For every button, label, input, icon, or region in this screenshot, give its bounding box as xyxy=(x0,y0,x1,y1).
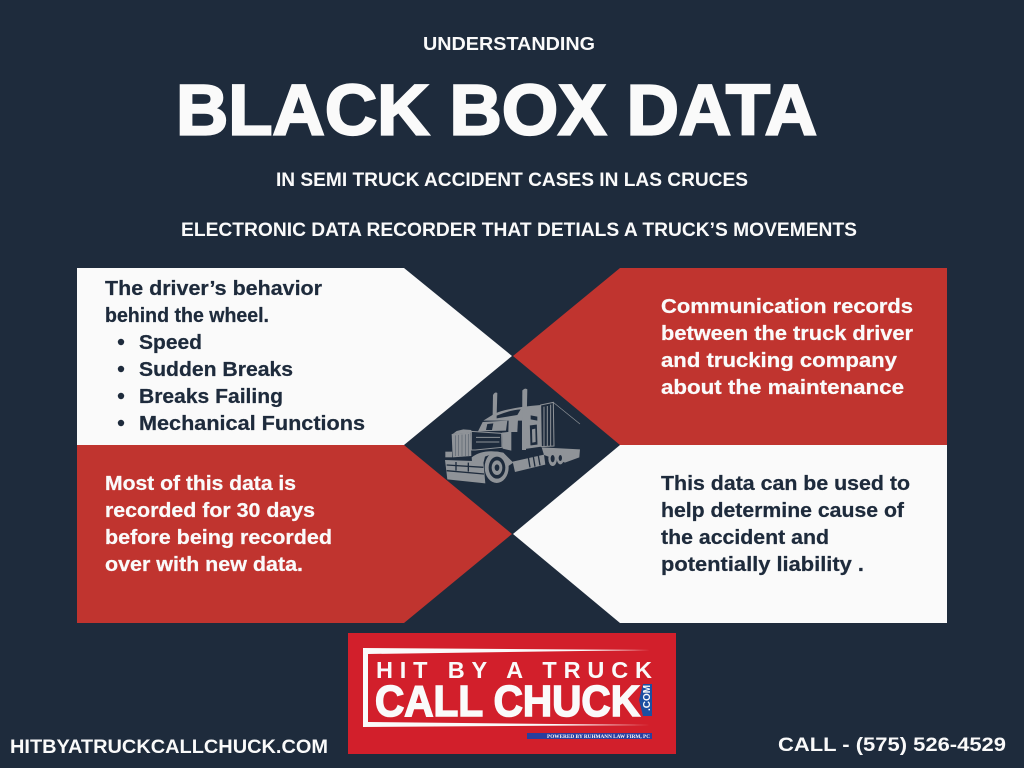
fuel tanks xyxy=(513,455,545,472)
eyebrow heading: UNDERSTANDING xyxy=(423,33,595,54)
panel text: Most of this data is xyxy=(105,472,296,495)
front wheel xyxy=(485,452,509,483)
panel text: Speed xyxy=(139,331,202,354)
logo com tag xyxy=(639,684,652,716)
panel shape xyxy=(513,445,947,623)
panel text: recorded for 30 days xyxy=(105,499,315,522)
panel text xyxy=(661,295,913,399)
panel text xyxy=(661,472,910,576)
panel text: about the maintenance xyxy=(661,376,904,399)
subtitle: IN SEMI TRUCK ACCIDENT CASES IN LAS CRUCES xyxy=(276,170,748,191)
icon: semi truck xyxy=(445,389,580,483)
logo: Hit by a Truck Call Chuck xyxy=(348,633,676,754)
panel text: Breaks Failing xyxy=(139,385,283,408)
panel text: behind the wheel. xyxy=(105,304,269,327)
logo credit strip xyxy=(527,733,652,740)
radiator grille xyxy=(452,432,471,457)
panel: driver behavior xyxy=(77,268,512,445)
panel text: Mechanical Functions xyxy=(139,412,365,435)
rear deck xyxy=(542,447,580,463)
panel text: This data can be used to xyxy=(661,472,910,495)
title: BLACK BOX DATA xyxy=(176,72,817,150)
com label: .COM xyxy=(642,685,653,711)
front fender xyxy=(472,451,513,466)
panel: use of data xyxy=(513,445,947,623)
logo line one: HIT BY A TRUCK xyxy=(376,657,652,683)
rear wheels xyxy=(548,451,557,466)
sleeper cab xyxy=(483,405,542,449)
panel shape xyxy=(77,268,512,445)
panel: communication records xyxy=(513,268,947,445)
panel text xyxy=(105,472,332,576)
description line: ELECTRONIC DATA RECORDER THAT DETIALS A TRUCK’S MOVEMENTS xyxy=(181,220,857,241)
panel text: and trucking company xyxy=(661,349,898,372)
logo credit strip: POWERED BY RUHMANN LAW FIRM, PC xyxy=(547,735,650,740)
panel: data retention xyxy=(77,445,512,623)
cab windows xyxy=(478,421,507,431)
panel text: before being recorded xyxy=(105,526,332,549)
panel text: The driver’s behavior xyxy=(105,277,322,300)
logo line two: CALL CHUCK xyxy=(375,677,640,726)
panel shape xyxy=(513,268,947,445)
website link: HITBYATRUCKCALLCHUCK.COM xyxy=(10,736,328,758)
panel text: over with new data. xyxy=(105,553,303,576)
panel text: Sudden Breaks xyxy=(139,358,293,381)
exhaust stacks xyxy=(493,392,497,415)
hood xyxy=(471,431,502,450)
phone number: CALL - (575) 526-4529 xyxy=(778,734,1006,756)
panel shape xyxy=(77,445,512,623)
panel text: help determine cause of xyxy=(661,499,904,522)
logo background xyxy=(348,633,676,754)
header block xyxy=(176,33,857,241)
logo frame xyxy=(363,648,650,727)
panel text: the accident and xyxy=(661,526,829,549)
front bumper xyxy=(445,452,452,457)
panel text: between the truck driver xyxy=(661,322,913,345)
panel text: Communication records xyxy=(661,295,913,318)
trailer xyxy=(541,402,554,447)
panel text: potentially liability . xyxy=(661,553,864,576)
panel text xyxy=(105,277,365,435)
